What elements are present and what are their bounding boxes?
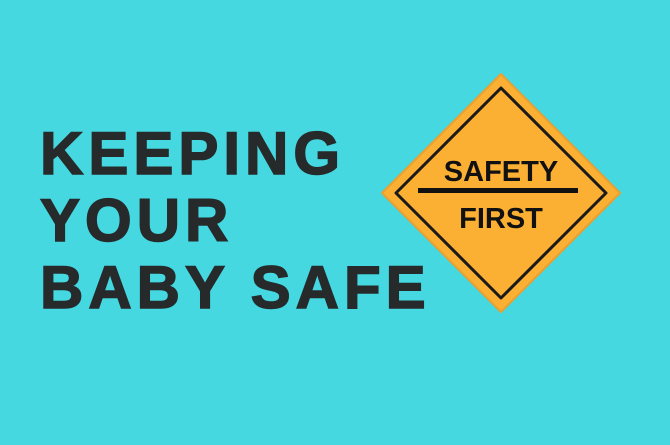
title line: your: YOUR [40,187,233,254]
title line: keeping: KEEPING [40,120,345,187]
title line: baby safe: BABY SAFE [40,254,431,321]
icon: safety first sign: FIRST [459,203,543,235]
title [40,120,431,321]
icon: safety first sign: SAFETY [444,156,558,188]
